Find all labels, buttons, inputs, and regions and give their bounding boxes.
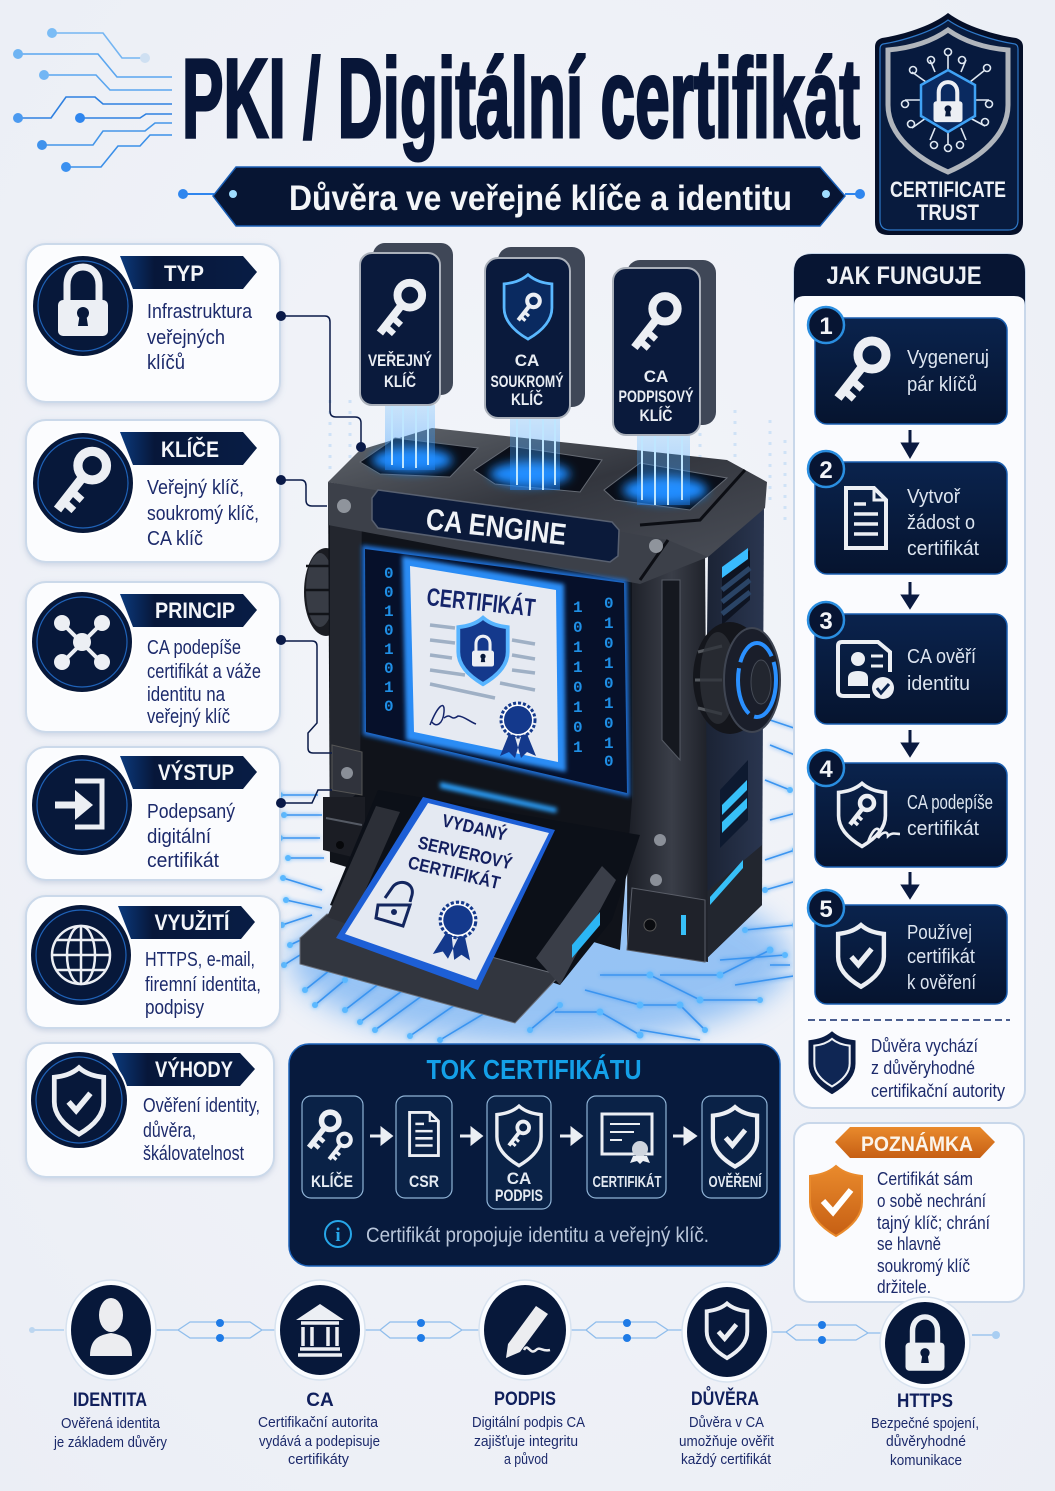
panel: PRINCIP: veřejný klíč bbox=[147, 706, 230, 728]
top plate bbox=[328, 428, 767, 584]
panel: VÝHODY bbox=[26, 1043, 274, 1177]
panel: TOK CERTIFIKÁTU bbox=[289, 1044, 780, 1266]
panel: VYUŽITÍ: VYUŽITÍ bbox=[154, 910, 230, 935]
panel: TOK CERTIFIKÁTU: TOK CERTIFIKÁTU bbox=[426, 1054, 642, 1085]
front pillar bbox=[627, 530, 708, 962]
step 2: žádost o bbox=[907, 512, 975, 534]
panel: PRINCIP: certifikát a váže bbox=[147, 661, 261, 683]
arrow bbox=[903, 430, 917, 456]
key card: CA private key bbox=[485, 247, 585, 418]
bottom: HTTPS: důvěryhodné bbox=[886, 1433, 966, 1450]
flow box: CA signature bbox=[487, 1096, 551, 1209]
panel: KLÍČE: CA klíč bbox=[147, 528, 203, 550]
key card: CA private key: SOUKROMÝ bbox=[490, 372, 564, 391]
step 1 bbox=[808, 307, 1007, 424]
bottom: HTTPS: komunikace bbox=[890, 1452, 962, 1469]
screen bbox=[362, 545, 630, 797]
bottom: CA bbox=[258, 1280, 380, 1468]
screen: 1 bbox=[573, 699, 583, 717]
key wells bbox=[360, 438, 727, 510]
flow box: certificate: CERTIFIKÁT bbox=[592, 1172, 662, 1191]
panel: TYP: Infrastruktura bbox=[147, 301, 253, 323]
panel: VÝSTUP bbox=[26, 747, 280, 880]
CA ENGINE plate: CA ENGINE bbox=[424, 503, 568, 552]
screen: 0 bbox=[604, 595, 614, 613]
trust note: certifikační autority bbox=[871, 1081, 1005, 1101]
info line: i bbox=[335, 1225, 341, 1246]
screen: 1 bbox=[384, 641, 394, 659]
screen: 0 bbox=[573, 719, 583, 737]
panel: TYP: klíčů bbox=[147, 352, 185, 374]
bottom: PODPIS: zajišťuje integritu bbox=[474, 1433, 578, 1450]
bottom: HTTPS bbox=[871, 1297, 979, 1469]
bottom: PODPIS: Digitální podpis CA bbox=[472, 1414, 585, 1431]
badge: certificate trust: CERTIFICATE bbox=[890, 177, 1006, 202]
arrow bbox=[460, 1129, 481, 1143]
front face bbox=[323, 483, 632, 950]
key card: public key: VEŘEJNÝ bbox=[368, 351, 433, 370]
screen: 0 bbox=[573, 679, 583, 697]
flow box: CA signature: CA bbox=[507, 1169, 531, 1188]
screen: 1 bbox=[573, 659, 583, 677]
panel: TYP: veřejných bbox=[147, 327, 225, 349]
screen: 1 bbox=[604, 615, 614, 633]
screen: 0 bbox=[384, 698, 394, 716]
badge: certificate trust: TRUST bbox=[917, 200, 979, 225]
step 3: 3 bbox=[819, 608, 833, 635]
bottom: PODPIS: PODPIS bbox=[494, 1389, 556, 1410]
bottom connectors bbox=[29, 1319, 1000, 1344]
trust note: Důvěra vychází bbox=[871, 1036, 978, 1056]
panel: PRINCIP: identitu na bbox=[147, 684, 226, 706]
bottom: PODPIS: a původ bbox=[504, 1451, 548, 1468]
circuit decoration top left bbox=[13, 28, 172, 172]
step 5: k ověření bbox=[907, 972, 976, 994]
bottom: CA: certifikáty bbox=[288, 1451, 349, 1468]
flow box: CA signature: PODPIS bbox=[495, 1186, 543, 1205]
bottom: IDENTITA: IDENTITA bbox=[73, 1390, 147, 1411]
flow box: verification: OVĚŘENÍ bbox=[708, 1172, 762, 1191]
bottom: CA: vydává a podepisuje bbox=[259, 1433, 380, 1450]
flow box: CSR bbox=[396, 1096, 452, 1198]
screen: 1 bbox=[384, 603, 394, 621]
trust note bbox=[810, 1033, 1005, 1101]
step 4: 4 bbox=[819, 756, 833, 783]
trust note: z důvěryhodné bbox=[871, 1058, 975, 1078]
output tray bbox=[300, 782, 640, 1023]
panel: TYP: TYP bbox=[164, 261, 204, 286]
bottom: HTTPS: HTTPS bbox=[897, 1391, 953, 1412]
step 5: 5 bbox=[819, 896, 833, 923]
step 2: Vytvoř bbox=[907, 486, 961, 508]
bottom: IDENTITA bbox=[53, 1280, 167, 1451]
screen: 1 bbox=[573, 739, 583, 757]
panel: VÝSTUP: digitální bbox=[147, 826, 211, 848]
screen: 0 bbox=[604, 715, 614, 733]
panel: VÝHODY: Ověření identity, bbox=[143, 1095, 260, 1117]
bottom: HTTPS: Bezpečné spojení, bbox=[871, 1415, 979, 1432]
panel: VYUŽITÍ: HTTPS, e-mail, bbox=[145, 949, 255, 971]
panel: POZNÁMKA bbox=[794, 1123, 1024, 1302]
screen: 0 bbox=[384, 565, 394, 583]
flow box: keys: KLÍČE bbox=[311, 1172, 353, 1191]
key card: CA signing key bbox=[613, 260, 716, 435]
panel: POZNÁMKA: se hlavně bbox=[877, 1234, 941, 1254]
panel: PRINCIP bbox=[26, 582, 280, 732]
panel: POZNÁMKA: soukromý klíč bbox=[877, 1256, 970, 1276]
step 3 bbox=[808, 602, 1007, 724]
bottom: IDENTITA: Ověřená identita bbox=[61, 1415, 161, 1432]
circuit floor under machine bbox=[277, 400, 803, 1045]
screen: 0 bbox=[384, 584, 394, 602]
flow box: verification bbox=[702, 1096, 767, 1198]
step 4 bbox=[808, 750, 1007, 867]
step 2: 2 bbox=[819, 457, 833, 484]
screen: 0 bbox=[604, 635, 614, 653]
key card: public key bbox=[360, 243, 453, 405]
issued certificate: VYDANÝ bbox=[440, 809, 509, 845]
key card: public key: KLÍČ bbox=[384, 372, 416, 391]
panel: KLÍČE: KLÍČE bbox=[161, 437, 219, 462]
panel: POZNÁMKA: POZNÁMKA bbox=[861, 1133, 973, 1156]
panel: VÝSTUP: VÝSTUP bbox=[158, 760, 234, 785]
screen: 0 bbox=[573, 619, 583, 637]
badge: certificate trust bbox=[875, 13, 1023, 235]
panel: VYUŽITÍ bbox=[26, 896, 280, 1028]
info line: Certifikát propojuje identitu a veřejný klíč. bbox=[366, 1224, 709, 1247]
step 5: certifikát bbox=[907, 946, 975, 968]
panel: VÝSTUP: certifikát bbox=[147, 850, 219, 872]
key card: CA private key: CA bbox=[515, 351, 539, 370]
subtitle banner bbox=[178, 167, 865, 226]
step 1: pár klíčů bbox=[907, 374, 977, 396]
connector lines bbox=[276, 311, 366, 808]
bottom: PODPIS bbox=[472, 1280, 585, 1468]
bottom: DŮVĚRA: Důvěra v CA bbox=[689, 1414, 764, 1431]
arrow bbox=[370, 1129, 391, 1143]
panel: TYP bbox=[26, 244, 280, 402]
panel: JAK FUNGUJE bbox=[794, 254, 1025, 1108]
flow box: CSR: CSR bbox=[409, 1172, 439, 1191]
screen: 1 bbox=[604, 735, 614, 753]
panel: POZNÁMKA: tajný klíč; chrání bbox=[877, 1213, 990, 1233]
subtitle banner: Důvěra ve veřejné klíče a identitu bbox=[289, 179, 792, 218]
arrow bbox=[903, 582, 917, 607]
issued certificate bbox=[336, 797, 555, 990]
bottom: IDENTITA: je základem důvěry bbox=[53, 1434, 167, 1451]
screen: 1 bbox=[384, 679, 394, 697]
bottom: DŮVĚRA: DŮVĚRA bbox=[691, 1387, 759, 1410]
screen: 1 bbox=[573, 639, 583, 657]
bottom: CA: CA bbox=[306, 1390, 334, 1411]
bottom: DŮVĚRA bbox=[679, 1282, 775, 1468]
step 4: certifikát bbox=[907, 818, 979, 840]
right side face bbox=[703, 506, 764, 962]
panel: VYUŽITÍ: firemní identita, bbox=[145, 974, 261, 996]
panel: KLÍČE: soukromý klíč, bbox=[147, 503, 259, 525]
screen: 0 bbox=[604, 753, 614, 771]
left knob bbox=[304, 548, 348, 636]
bottom: DŮVĚRA: každý certifikát bbox=[681, 1451, 772, 1468]
arrow bbox=[560, 1129, 581, 1143]
step 1: Vygeneruj bbox=[907, 347, 989, 369]
key card: CA private key: KLÍČ bbox=[511, 390, 543, 409]
panel: KLÍČE bbox=[26, 420, 280, 562]
step 5: Používej bbox=[907, 922, 972, 944]
panel: VYUŽITÍ: podpisy bbox=[145, 997, 204, 1019]
bottom: CA: Certifikační autorita bbox=[258, 1414, 379, 1431]
step 5 bbox=[808, 890, 1007, 1004]
panel: POZNÁMKA: Certifikát sám bbox=[877, 1169, 973, 1189]
panel: POZNÁMKA: o sobě nechrání bbox=[877, 1191, 986, 1211]
step 1: 1 bbox=[819, 313, 833, 340]
flow box: certificate bbox=[587, 1096, 666, 1198]
panel: VÝHODY: škálovatelnost bbox=[143, 1143, 244, 1165]
panel: PRINCIP: CA podepíše bbox=[147, 637, 241, 659]
step 3: CA ověří bbox=[907, 646, 976, 668]
flow box: keys bbox=[302, 1096, 363, 1198]
certificate on screen bbox=[402, 556, 566, 772]
screen: 1 bbox=[604, 695, 614, 713]
arrow bbox=[673, 1129, 695, 1143]
screen: 1 bbox=[604, 655, 614, 673]
key card: CA signing key: KLÍČ bbox=[640, 406, 672, 425]
arrow bbox=[903, 730, 917, 755]
right dial bbox=[693, 622, 780, 734]
step 2 bbox=[808, 451, 1007, 574]
screen: 1 bbox=[573, 599, 583, 617]
light beams bbox=[385, 405, 690, 505]
bottom: DŮVĚRA: umožňuje ověřit bbox=[679, 1433, 775, 1450]
screen: 0 bbox=[604, 675, 614, 693]
screen: 0 bbox=[384, 660, 394, 678]
panel: KLÍČE: Veřejný klíč, bbox=[147, 477, 244, 499]
panel: JAK FUNGUJE: JAK FUNGUJE bbox=[826, 262, 982, 290]
certificate on screen: CERTIFIKÁT bbox=[425, 582, 537, 622]
machine: CA engine bbox=[300, 428, 780, 1023]
screen: 0 bbox=[384, 622, 394, 640]
panel: VÝHODY: důvěra, bbox=[143, 1120, 196, 1142]
key card: CA signing key: CA bbox=[644, 367, 668, 386]
issued certificate: SERVEROVÝ bbox=[416, 831, 514, 873]
key card: CA signing key: PODPISOVÝ bbox=[618, 387, 694, 406]
step 2: certifikát bbox=[907, 538, 979, 560]
issued certificate: CERTIFIKÁT bbox=[406, 851, 502, 893]
panel: VÝSTUP: Podepsaný bbox=[147, 801, 235, 823]
CA ENGINE plate bbox=[372, 490, 619, 562]
panel: VÝHODY: VÝHODY bbox=[155, 1057, 233, 1082]
panel: PRINCIP: PRINCIP bbox=[155, 598, 235, 623]
step 3: identitu bbox=[907, 673, 970, 695]
arrow bbox=[903, 872, 917, 897]
panel: POZNÁMKA: držitele. bbox=[877, 1277, 931, 1297]
step 4: CA podepíše bbox=[907, 792, 993, 814]
